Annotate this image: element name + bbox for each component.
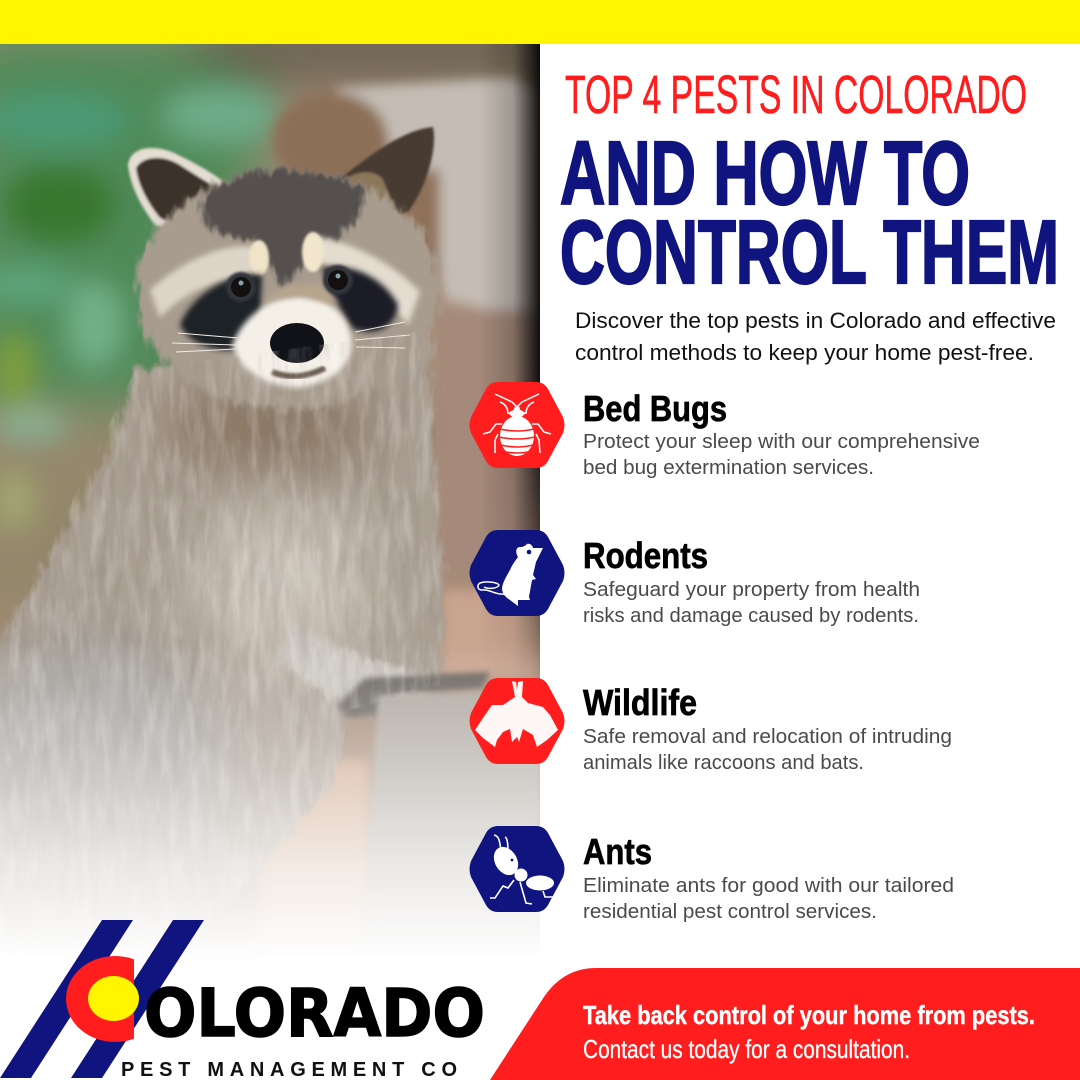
text block: wildlife (583, 682, 952, 774)
text block: ants: Eliminate ants for good with our tailored (583, 875, 954, 897)
text block: bed bugs: Protect your sleep with our comprehensive (583, 431, 980, 453)
call to action banner (490, 968, 1080, 1080)
text block: rodents: Safeguard your property from health (583, 579, 920, 601)
chest and belly shading (7, 374, 391, 746)
right-edge shadow (487, 44, 540, 678)
text block: rodents (583, 535, 920, 627)
text block: rodents: Rodents (583, 535, 708, 576)
top yellow bar (0, 0, 1080, 44)
intro paragraph: Discover the top pests in Colorado and effective (575, 308, 1056, 333)
text block: wildlife: Safe removal and relocation of intruding (583, 726, 952, 748)
white fade to the bottom (0, 640, 540, 960)
text block: wildlife: animals like raccoons and bats. (583, 752, 864, 774)
text block: ants: Ants (583, 831, 652, 872)
icon: rodent hexagon (470, 530, 564, 616)
icon: bat hexagon (470, 678, 564, 764)
text block: rodents: risks and damage caused by rodents. (583, 605, 919, 627)
logo stripes (0, 920, 204, 1078)
text block: wildlife: Wildlife (583, 682, 697, 723)
text block: ants: residential pest control services. (583, 901, 877, 923)
call to action banner: Contact us today for a consultation. (583, 1034, 910, 1064)
logo yellow circle (88, 976, 139, 1021)
logo (0, 920, 485, 1080)
birch log and stump behind the head (266, 71, 540, 886)
text block: ants (583, 831, 954, 923)
icon: bed bug hexagon (470, 382, 564, 468)
intro paragraph: control methods to keep your home pest-free. (575, 340, 1034, 365)
raccoon body (0, 334, 450, 856)
intro paragraph (575, 308, 1056, 365)
text block: bed bugs: Bed Bugs (583, 388, 727, 429)
logo wordmark: OLORADO (144, 975, 485, 1052)
fore-leg (280, 620, 430, 715)
logo red C (66, 956, 134, 1042)
wooden post (371, 690, 540, 880)
photo: raccoon standing on a post (0, 44, 540, 936)
text block: bed bugs: bed bug extermination services. (583, 457, 874, 479)
raccoon head (136, 170, 440, 410)
text block: bed bugs (583, 388, 980, 479)
raccoon ears (128, 127, 434, 240)
paw on post (337, 672, 490, 718)
icon: ant hexagon (470, 826, 564, 912)
title block (560, 65, 1059, 303)
fur texture (0, 330, 442, 838)
